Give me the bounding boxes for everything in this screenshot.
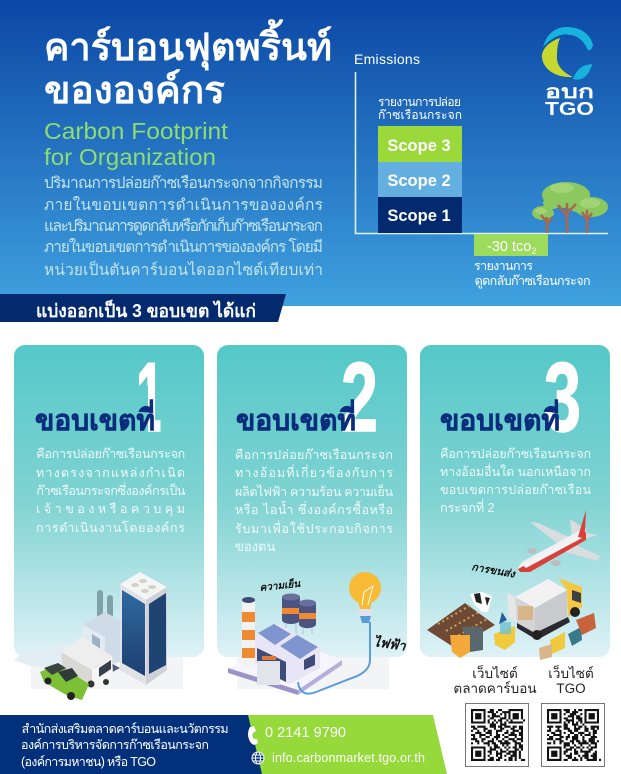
icon: trees bbox=[532, 182, 608, 233]
farm plot bbox=[427, 603, 495, 648]
QR label: carbon market website bbox=[453, 664, 537, 696]
panel: scope 2 bbox=[217, 342, 407, 695]
organisation text: สำนักส่งเสริมตลาดคาร์บอนและนวัตกรรม bbox=[22, 722, 229, 736]
description: ทางอ้อมที่เกี่ยวข้องกับการ bbox=[235, 464, 393, 480]
heading: ขอบเขตที่ bbox=[236, 399, 356, 437]
emissions chart bbox=[354, 51, 608, 289]
heading: ขอบเขตที่ bbox=[35, 399, 155, 437]
bar: scope 1 bbox=[378, 197, 462, 233]
truck bbox=[61, 637, 112, 670]
green car bbox=[40, 664, 89, 700]
description: หรือ ไอน้ำ ซึ่งองค์กรซื้อหรือ bbox=[235, 500, 393, 517]
description bbox=[235, 448, 393, 554]
description: ทางอ้อมอื่นใด นอกเหนือจาก bbox=[440, 463, 591, 479]
navy band bbox=[0, 715, 262, 774]
description: การดำเนินงานโดยองค์กร bbox=[36, 520, 185, 535]
illustration: power plant and light bulb bbox=[228, 572, 407, 695]
title bbox=[44, 19, 332, 112]
section banner bbox=[0, 294, 286, 322]
removal bar bbox=[474, 234, 548, 256]
bar: scope 2 bbox=[378, 162, 462, 197]
section banner: แบ่งออกเป็น 3 ขอบเขต ได้แก่ bbox=[36, 299, 256, 321]
bins bbox=[462, 627, 483, 652]
illustration: transport and logistics bbox=[427, 510, 600, 660]
intro paragraph bbox=[44, 174, 323, 279]
intro paragraph: ปริมาณการปล่อยก๊าซเรือนกระจกจากกิจกรรม bbox=[44, 174, 323, 192]
recycling bins bbox=[568, 627, 582, 646]
description: ขอบเขตการปล่อยก๊าซเรือน bbox=[440, 483, 591, 497]
organisation text: (องค์การมหาชน) หรือ TGO bbox=[21, 755, 156, 769]
chart title: Emissions bbox=[354, 51, 420, 67]
panel: scope 3 bbox=[420, 342, 610, 660]
numeral 3: 3 bbox=[544, 342, 581, 452]
chimney bbox=[242, 599, 255, 667]
forklift bbox=[494, 626, 515, 650]
panel: scope 1 bbox=[14, 342, 204, 700]
bar: scope 2: Scope 2 bbox=[387, 172, 451, 190]
second forklift bbox=[550, 632, 565, 654]
QR code: carbon market bbox=[466, 704, 528, 766]
card background bbox=[420, 345, 610, 657]
logo wordmark: TGO bbox=[545, 99, 594, 119]
QR label: TGO website: TGO bbox=[556, 681, 586, 696]
subtitle: for Organization bbox=[44, 144, 216, 170]
icon: globe bbox=[252, 752, 264, 764]
numeral 2: 2 bbox=[341, 342, 378, 452]
subtitle: Carbon Footprint bbox=[44, 118, 229, 144]
organisation text: องค์การบริหารจัดการก๊าซเรือนกระจก bbox=[21, 738, 209, 752]
description: ของตน bbox=[235, 539, 275, 554]
description: ทางตรงจากแหล่งกำเนิด bbox=[36, 466, 185, 480]
bar: scope 3: Scope 3 bbox=[387, 137, 451, 155]
removal report label: ดูดกลับก๊าซเรือนกระจก bbox=[475, 274, 591, 289]
intro paragraph: ภายในขอบเขตการดำเนินการขององค์กร bbox=[44, 196, 323, 214]
illustration: factory, building and vehicles bbox=[14, 572, 183, 700]
QR label: carbon market website: ตลาดคาร์บอน bbox=[453, 680, 537, 696]
QR label: TGO website: เว็บไซต์ bbox=[548, 664, 594, 681]
heading: ขอบเขตที่ bbox=[440, 399, 560, 437]
header background bbox=[0, 0, 621, 306]
icon: phone bbox=[248, 726, 258, 745]
label: electricity: ไฟฟ้า bbox=[373, 634, 407, 654]
removal report label bbox=[474, 259, 591, 289]
description: กระจกที่ 2 bbox=[440, 499, 495, 515]
logo wordmark: อบก bbox=[545, 82, 594, 103]
bar: scope 1: Scope 1 bbox=[387, 207, 451, 225]
bar: scope 3 bbox=[378, 126, 462, 162]
card background bbox=[14, 345, 204, 657]
removal report label: รายงานการ bbox=[474, 259, 533, 273]
removal bar: -30 tco bbox=[487, 239, 531, 255]
intro paragraph: และปริมาณการดูดกลับหรือกักเก็บก๊าซเรือนกระจก bbox=[44, 216, 323, 236]
description: คือการปล่อยก๊าซเรือนกระจก bbox=[440, 447, 591, 461]
label: transport: การขนส่ง bbox=[470, 561, 517, 581]
title: ขององค์กร bbox=[44, 69, 226, 112]
removal bar: 2 bbox=[531, 246, 536, 256]
light bulb bbox=[349, 572, 381, 604]
logo mark bbox=[542, 27, 593, 80]
delivery truck bbox=[515, 579, 567, 608]
logo: TGO bbox=[542, 27, 594, 119]
cow bbox=[470, 592, 492, 612]
subtitle bbox=[44, 118, 229, 170]
airplane bbox=[530, 522, 578, 547]
emissions report label: ก๊าซเรือนกระจก bbox=[378, 108, 462, 122]
intro paragraph: ภายในขอบเขตการดำเนินการขององค์กร โดยมี bbox=[44, 238, 323, 256]
description: ผลิตไฟฟ้า ความร้อน ความเย็น bbox=[235, 484, 393, 499]
QR label: TGO website bbox=[548, 664, 594, 696]
description: ก๊าซเรือนกระจกซึ่งองค์กรเป็น bbox=[36, 482, 186, 498]
footer contact band bbox=[0, 715, 447, 774]
label: cold: ความเย็น bbox=[259, 577, 302, 594]
green band bbox=[240, 715, 447, 774]
cable bbox=[298, 622, 370, 694]
description: คือการปล่อยก๊าซเรือนกระจก bbox=[235, 448, 393, 462]
website: info.carbonmarket.tgo.or.th bbox=[272, 751, 425, 765]
card background bbox=[217, 345, 407, 657]
description: คือการปล่อยก๊าซเรือนกระจก bbox=[36, 447, 185, 461]
base platform bbox=[228, 640, 342, 690]
intro paragraph: หน่วยเป็นตันคาร์บอนไดออกไซด์เทียบเท่า bbox=[44, 260, 323, 279]
numeral 1: 1 bbox=[136, 342, 164, 452]
description: เจ้าของหรือควบคุม bbox=[36, 502, 185, 517]
office tower bbox=[120, 572, 167, 600]
emissions report label: รายงานการปล่อย bbox=[378, 95, 461, 109]
factory bbox=[97, 590, 103, 620]
phone number: 0 2141 9790 bbox=[265, 725, 346, 741]
organisation text bbox=[21, 722, 229, 769]
description bbox=[36, 447, 186, 535]
chart axes bbox=[356, 72, 608, 234]
description bbox=[440, 447, 591, 515]
emissions report label bbox=[378, 95, 462, 122]
title: คาร์บอนฟุตพริ้นท์ bbox=[44, 19, 332, 71]
tanks bbox=[282, 597, 300, 624]
QR label: carbon market website: เว็บไซต์ bbox=[472, 664, 518, 681]
QR code: TGO bbox=[542, 704, 604, 766]
description: รับมาเพื่อใช้ประกอบกิจการ bbox=[235, 520, 393, 536]
logo wordmark bbox=[545, 82, 594, 119]
factory building bbox=[255, 623, 320, 684]
